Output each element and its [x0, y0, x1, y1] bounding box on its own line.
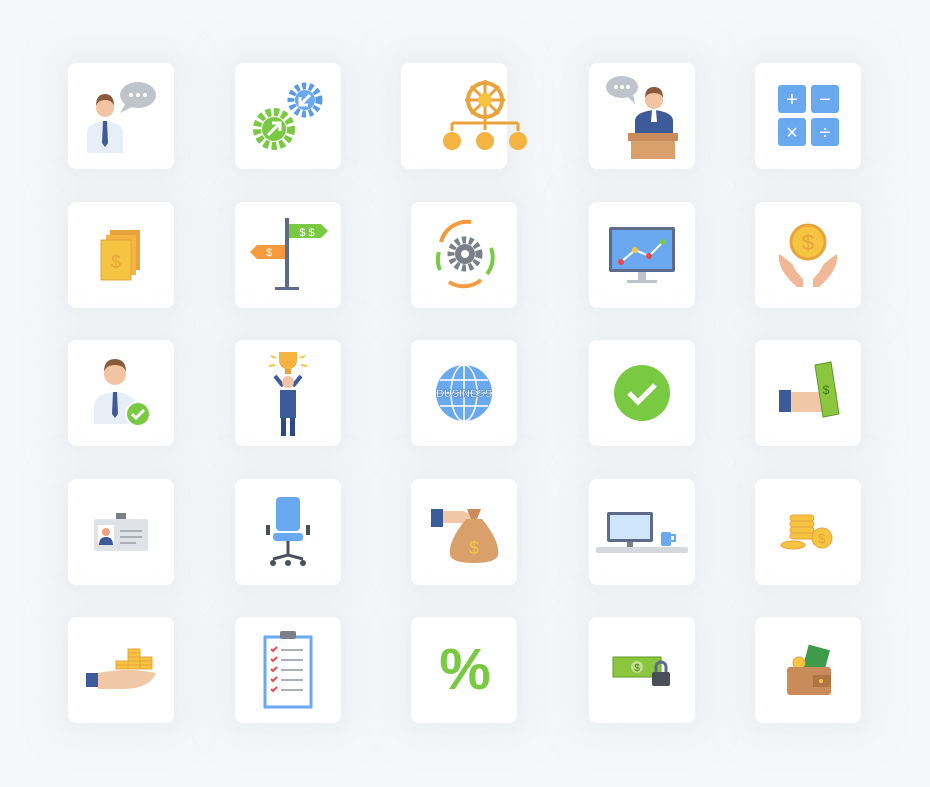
- card: money lock: [589, 617, 695, 723]
- card: trophy winner: [235, 340, 341, 446]
- card: check: [589, 340, 695, 446]
- card: checklist: [235, 617, 341, 723]
- card: hands coin: $: [802, 230, 814, 255]
- card: business globe: [411, 340, 517, 446]
- card: businessman speech: [68, 63, 174, 169]
- card: calculator: ×: [786, 122, 798, 144]
- card: signpost: $ $: [299, 227, 315, 239]
- card: money stack: [68, 202, 174, 308]
- card: percent: [411, 617, 517, 723]
- card: money stack: $: [111, 252, 121, 272]
- card: hand with cash: $: [823, 383, 830, 397]
- card: hand with cash: [755, 340, 861, 446]
- card: leadership wheel: [401, 63, 507, 169]
- card: ID badge: [68, 479, 174, 585]
- card: gears: [235, 63, 341, 169]
- card: money bag hand: [411, 479, 517, 585]
- card: signpost: [235, 202, 341, 308]
- card: calculator: [755, 63, 861, 169]
- card: calculator: −: [819, 89, 831, 111]
- card: coins: [755, 479, 861, 585]
- card: signpost: $: [266, 247, 272, 259]
- card: employee approved: [68, 340, 174, 446]
- card: wallet: [755, 617, 861, 723]
- card: process gear: [411, 202, 517, 308]
- card: speaker podium: [589, 63, 695, 169]
- card: hands coin: [755, 202, 861, 308]
- card: workspace: [589, 479, 695, 585]
- card: calculator: +: [786, 89, 798, 111]
- card: coins: $: [818, 531, 826, 546]
- card: calculator: ÷: [820, 122, 831, 144]
- card: hand coins: [68, 617, 174, 723]
- card: monitor chart: [589, 202, 695, 308]
- card: business globe: BUSINESS: [436, 388, 492, 400]
- card: money bag hand: $: [469, 538, 479, 558]
- card: percent: %: [439, 637, 491, 702]
- card: money lock: $: [634, 663, 640, 674]
- card: office chair: [235, 479, 341, 585]
